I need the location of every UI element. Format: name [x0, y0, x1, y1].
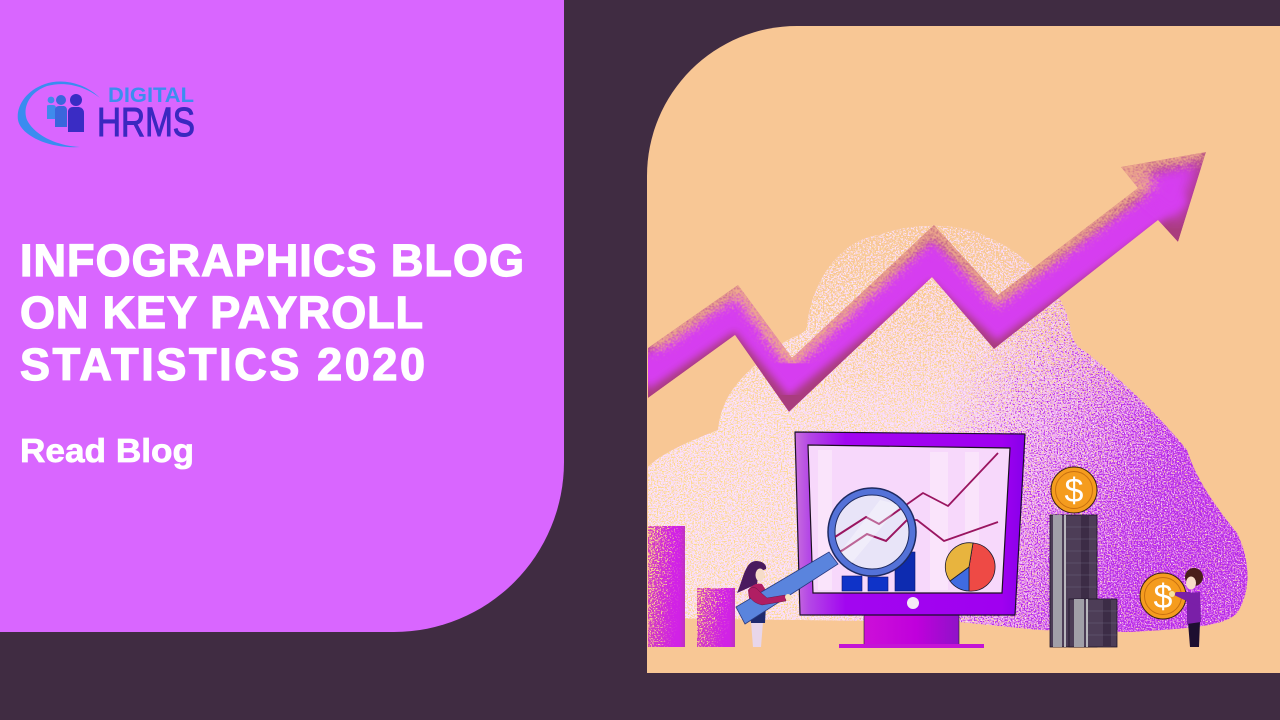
line chart on screen — [835, 453, 998, 552]
magnifying glass — [736, 488, 923, 624]
bar: tall left column — [648, 526, 685, 647]
icon: logo swoosh — [18, 82, 100, 147]
panel: illustration — [640, 26, 1280, 673]
magnifier handle — [736, 552, 838, 624]
monitor screen — [808, 445, 1010, 593]
bar chart on screen — [842, 552, 915, 591]
figure: woman holding magnifier — [737, 561, 767, 647]
logo wordmark: DIGITAL: DIGITAL — [108, 84, 194, 107]
pie chart on screen — [945, 543, 995, 591]
monitor stand — [839, 615, 984, 648]
figure: man holding coin — [1169, 568, 1203, 647]
logo wordmark: HRMS: HRMS — [97, 99, 195, 145]
title: STATISTICS 2020 — [20, 339, 425, 390]
monitor — [795, 432, 1025, 648]
coin stacks — [1050, 515, 1117, 647]
logo: Digital HRMS — [18, 82, 195, 147]
magnifier lens — [828, 488, 923, 576]
icon: dollar coin on stack: $ — [1065, 472, 1084, 510]
bar: short left column — [697, 588, 735, 647]
title — [20, 235, 524, 390]
icon: dollar coin held by man — [1140, 573, 1186, 619]
title: ON KEY PAYROLL — [20, 287, 423, 338]
woman's arm over handle — [749, 587, 791, 605]
panel: left banner — [0, 0, 564, 632]
growth arrow — [640, 147, 1206, 412]
short stack — [1069, 599, 1117, 647]
icon: three people — [47, 94, 84, 132]
title: INFOGRAPHICS BLOG — [20, 235, 524, 286]
link text: Read Blog: Read Blog — [20, 432, 194, 469]
icon: dollar coin on stack — [1051, 467, 1097, 513]
icon: dollar coin held by man: $ — [1154, 578, 1173, 616]
monitor power button — [907, 597, 919, 609]
tall stack — [1050, 515, 1097, 647]
monitor body — [795, 432, 1025, 615]
speckled cloud — [648, 220, 1258, 640]
